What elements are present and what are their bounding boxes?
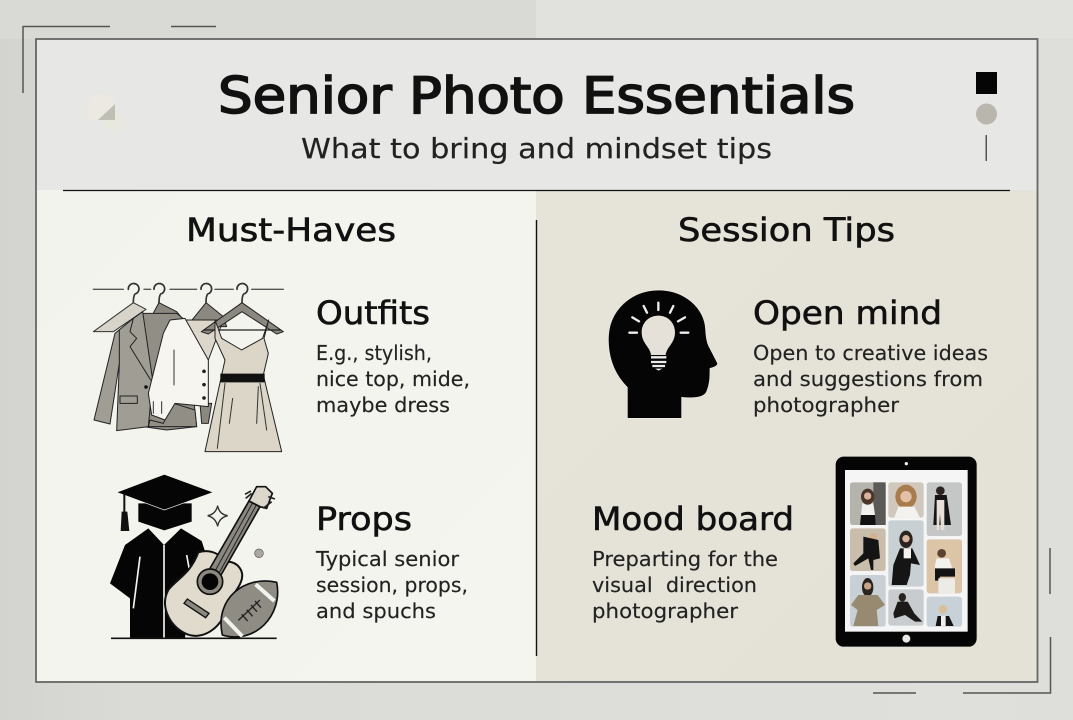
icon: graduation cap, gown, guitar and football [110,474,278,638]
text: outfits description: nice top, mide, [316,367,470,391]
icon: clothes on hangers [93,284,283,452]
icon: faded geometric shape [88,93,126,133]
text: props description: session, props, [316,573,468,597]
text: props description: and spuchs [316,599,436,623]
panel: must-haves [36,190,536,682]
text: outfits description: maybe dress [316,393,450,417]
text: props description [315,547,468,623]
text: mood board description: photographer [592,599,739,623]
text: open mind description: Open to creative ideas [753,341,988,365]
icon: tablet with mood board photos [836,457,977,647]
title: Senior Photo Essentials [218,67,855,125]
icon: head with light bulb [608,290,718,418]
panel: header [36,39,1037,190]
text: mood board description: Preparting for the [592,547,778,571]
text: open mind description: photographer [753,393,900,417]
text: mood board description [592,547,778,623]
heading: props: Props [316,500,412,538]
heading: open mind: Open mind [753,294,942,332]
heading: outfits: Outfits [316,294,430,332]
heading: mood board: Mood board [592,500,794,538]
subtitle: What to bring and mindset tips [301,132,772,165]
text: mood board description: visual direction [592,573,757,597]
text: props description: Typical senior [315,547,460,571]
text: open mind description: and suggestions from [753,367,983,391]
photo grid [850,482,962,627]
heading: must-haves: Must-Haves [186,211,396,249]
panel: session tips [536,190,1037,682]
text: outfits description [316,341,470,417]
heading: session tips: Session Tips [678,211,895,249]
text: open mind description [753,341,988,417]
icon: square, circle and line accent [976,72,997,161]
text: outfits description: E.g., stylish, [316,341,432,365]
